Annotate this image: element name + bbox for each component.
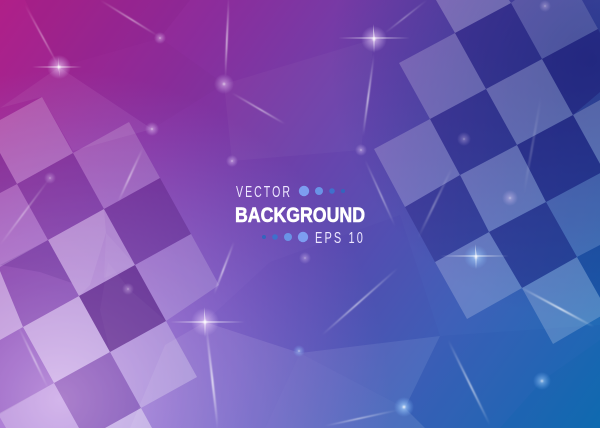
dots: upper row (299, 186, 345, 196)
dark tiles: right grid (405, 3, 600, 312)
light tiles: right grid (374, 0, 600, 344)
text: EPS 10: EPS 10 (315, 230, 365, 247)
left diamond checker grid (0, 97, 219, 428)
dots: lower row (262, 232, 308, 242)
text: VECTOR: VECTOR (236, 184, 292, 201)
title block (235, 184, 365, 247)
star flares (32, 24, 510, 337)
tile inner facets (0, 209, 166, 352)
right diamond checker grid (374, 0, 600, 344)
light tiles: left grid (0, 97, 219, 428)
text: BACKGROUND: BACKGROUND (235, 203, 365, 227)
dark tiles: left grid (0, 153, 191, 428)
